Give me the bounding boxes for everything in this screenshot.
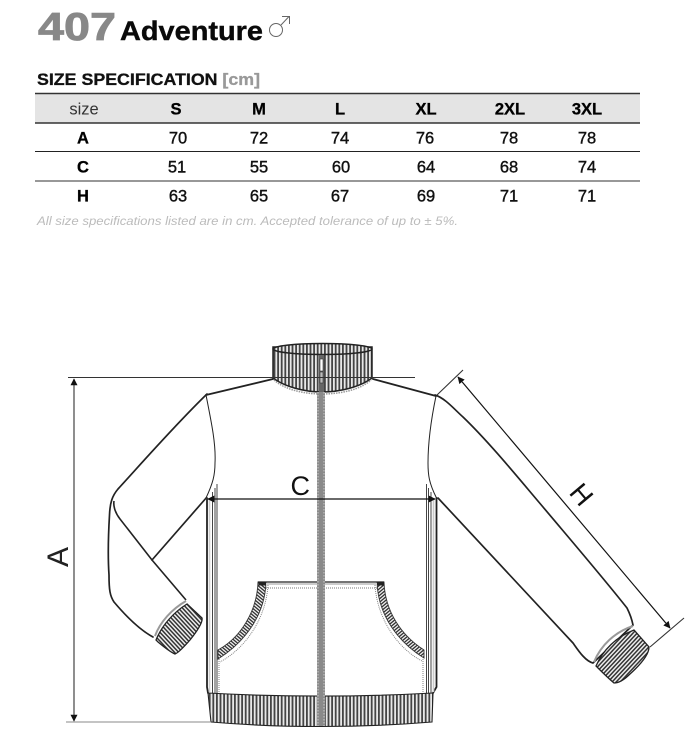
row H: H bbox=[77, 188, 89, 206]
row A: 72 bbox=[250, 130, 268, 148]
row C bbox=[77, 158, 596, 176]
table header row: XL bbox=[415, 100, 437, 118]
right sleeve bbox=[435, 395, 649, 683]
heading: size specification: SIZE SPECIFICATION [cm] bbox=[37, 71, 260, 89]
row H: 63 bbox=[169, 188, 187, 206]
row C: 55 bbox=[250, 158, 268, 176]
row H: 71 bbox=[578, 188, 596, 206]
table header row: 3XL bbox=[572, 100, 602, 118]
row C: 60 bbox=[332, 158, 350, 176]
left cuff bbox=[156, 604, 202, 654]
shoulder seams bbox=[206, 379, 436, 693]
product name: Adventure bbox=[120, 16, 263, 46]
row C: C bbox=[77, 158, 89, 176]
row C: 74 bbox=[578, 158, 596, 176]
size table bbox=[35, 94, 640, 206]
table header row: size bbox=[69, 100, 99, 118]
row A: A bbox=[77, 130, 89, 148]
row H bbox=[77, 188, 596, 206]
collar bbox=[273, 344, 372, 394]
armholes bbox=[206, 395, 436, 498]
row H: 65 bbox=[250, 188, 268, 206]
table header row: L bbox=[335, 100, 345, 118]
row H: 69 bbox=[417, 188, 435, 206]
row H: 67 bbox=[331, 188, 349, 206]
title: 407 Adventure bbox=[38, 6, 290, 49]
row A bbox=[77, 130, 596, 148]
hem rib bbox=[208, 693, 433, 726]
label H: H bbox=[563, 478, 599, 512]
row H: 71 bbox=[500, 188, 518, 206]
dimension H: sleeve length bbox=[437, 370, 684, 647]
row A: 74 bbox=[331, 130, 349, 148]
table header row: S bbox=[170, 100, 182, 118]
label C: C bbox=[290, 471, 310, 501]
row C: 68 bbox=[500, 158, 518, 176]
label A: A bbox=[42, 547, 75, 567]
table header row bbox=[69, 100, 602, 118]
jacket technical drawing bbox=[108, 344, 649, 726]
row C: 64 bbox=[417, 158, 435, 176]
row A: 76 bbox=[416, 130, 434, 148]
table header row: 2XL bbox=[495, 100, 525, 118]
right cuff bbox=[596, 630, 649, 683]
row A: 78 bbox=[500, 130, 518, 148]
jacket body fill bbox=[206, 379, 436, 693]
product number: 407 bbox=[38, 6, 116, 49]
icon: male symbol bbox=[270, 16, 290, 36]
pocket bbox=[218, 582, 424, 693]
table header row: M bbox=[252, 100, 266, 118]
tolerance note: All size specifications listed are in cm. Accepted tolerance of up to ± 5%. bbox=[36, 216, 458, 228]
row A: 70 bbox=[169, 130, 187, 148]
row A: 78 bbox=[578, 130, 596, 148]
centre zipper bbox=[317, 355, 325, 726]
side panel lines bbox=[210, 484, 434, 693]
row C: 51 bbox=[168, 158, 186, 176]
left sleeve bbox=[108, 394, 207, 654]
